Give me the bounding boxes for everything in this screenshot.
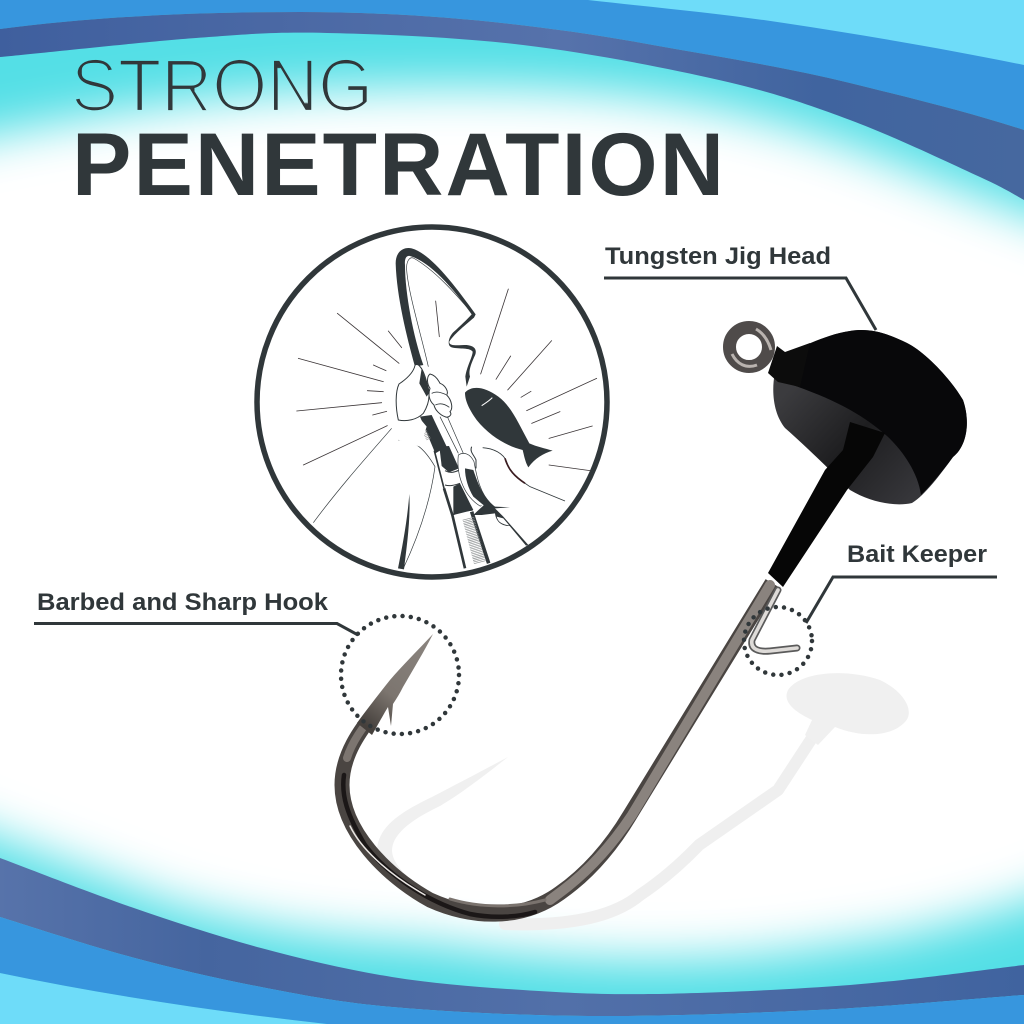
jig hook (342, 328, 967, 917)
badge circle (257, 227, 607, 577)
right hand on reel (458, 453, 528, 546)
title line: PENETRATION: PENETRATION (72, 114, 724, 214)
eyelet ring (730, 328, 810, 387)
callout: tungsten jig head: Tungsten Jig Head (605, 243, 831, 270)
left hand (396, 364, 452, 447)
black painted shaft (768, 422, 885, 587)
callout: tungsten jig head (604, 243, 876, 330)
jig head (773, 330, 967, 504)
burst rays (297, 289, 597, 471)
left arm and sleeve lines (313, 428, 435, 568)
illustration: angler fighting a fish (257, 227, 607, 577)
title (71, 44, 724, 214)
fishing rod (420, 415, 489, 568)
shadow of the jig on the ground (377, 673, 909, 924)
bottom wave bands (0, 858, 1024, 1024)
callout: bait keeper (744, 541, 997, 675)
callout: bait keeper: Bait Keeper (847, 541, 987, 568)
hook point and barb (357, 634, 433, 735)
top wave bands (0, 0, 1024, 200)
right arm outline (471, 447, 565, 501)
callout: barbed and sharp hook (34, 589, 459, 734)
fish (465, 388, 553, 467)
title line: STRONG: STRONG (71, 44, 373, 127)
sleeve fold (398, 494, 410, 569)
bent rod tip and line (396, 248, 476, 387)
callout: barbed and sharp hook: Barbed and Sharp Hook (37, 589, 329, 616)
hook wire (342, 583, 772, 917)
bait keeper spike (752, 590, 797, 651)
